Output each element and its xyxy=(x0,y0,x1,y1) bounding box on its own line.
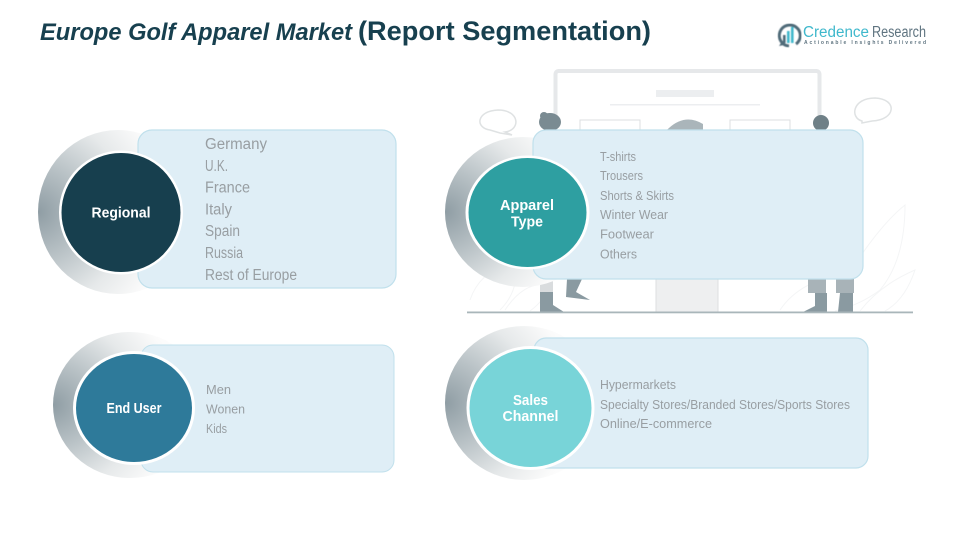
logo: Credence Research: Credence xyxy=(803,24,869,41)
title xyxy=(40,16,651,46)
card xyxy=(533,130,863,279)
list: Others xyxy=(600,246,637,262)
panel: apparel type: Apparel xyxy=(500,197,554,214)
panel: sales channel: Sales xyxy=(513,392,548,409)
list: Wonen xyxy=(206,402,245,416)
list: T-shirts xyxy=(600,149,636,164)
illustration: right figure xyxy=(803,115,854,312)
badge xyxy=(73,351,195,465)
list xyxy=(600,377,850,431)
panel: apparel type: Type xyxy=(511,214,543,230)
list: Specialty Stores/Branded Stores/Sports Stores xyxy=(600,397,850,412)
list: Trousers xyxy=(600,168,643,183)
list xyxy=(600,149,674,262)
badge xyxy=(59,150,183,274)
title: Europe Golf Apparel Market xyxy=(40,19,353,46)
list xyxy=(206,382,245,436)
crescent xyxy=(445,137,601,287)
crescent xyxy=(445,326,603,480)
panel: regional: Regional xyxy=(92,204,150,222)
badge xyxy=(466,156,590,270)
list: Kids xyxy=(206,421,227,436)
panel: end user: End User xyxy=(106,400,162,417)
panel: sales channel: Channel xyxy=(502,408,558,425)
card xyxy=(141,345,394,472)
title: (Report Segmentation) xyxy=(358,16,651,46)
list: U.K. xyxy=(205,158,228,175)
ground line xyxy=(467,312,913,313)
panel: end user xyxy=(53,332,394,478)
background illustration: presentation board with figures xyxy=(467,71,915,313)
crescent xyxy=(38,130,198,294)
list: Winter Wear xyxy=(600,207,669,222)
logo: Credence Research: Research xyxy=(872,24,926,41)
icon: logo magnifier with bars xyxy=(779,25,800,46)
list: Germany xyxy=(205,136,267,153)
list: Hypermarkets xyxy=(600,377,676,392)
illustration: speech bubbles xyxy=(480,98,891,135)
list: Spain xyxy=(205,223,240,240)
panel: sales channel xyxy=(445,326,868,480)
badge xyxy=(466,346,594,470)
list: Rest of Europe xyxy=(205,267,297,284)
card xyxy=(138,130,396,288)
list: France xyxy=(205,180,250,196)
list: Footwear xyxy=(600,226,655,242)
panel: apparel type xyxy=(445,130,863,287)
crescent xyxy=(53,332,207,478)
list: Shorts & Skirts xyxy=(600,188,674,203)
illustration: left figure xyxy=(539,112,590,312)
illustration: leaves xyxy=(470,205,915,311)
list: Online/E-commerce xyxy=(600,416,712,431)
card xyxy=(534,338,868,468)
list: Men xyxy=(206,382,231,397)
logo: Credence Research: Actionable Insights Delivered xyxy=(804,40,926,46)
list: Russia xyxy=(205,245,243,262)
list xyxy=(205,136,297,284)
list: Italy xyxy=(205,202,232,218)
illustration: presentation board xyxy=(556,71,820,312)
panel: regional xyxy=(38,130,396,294)
logo: Credence Research xyxy=(779,24,926,46)
